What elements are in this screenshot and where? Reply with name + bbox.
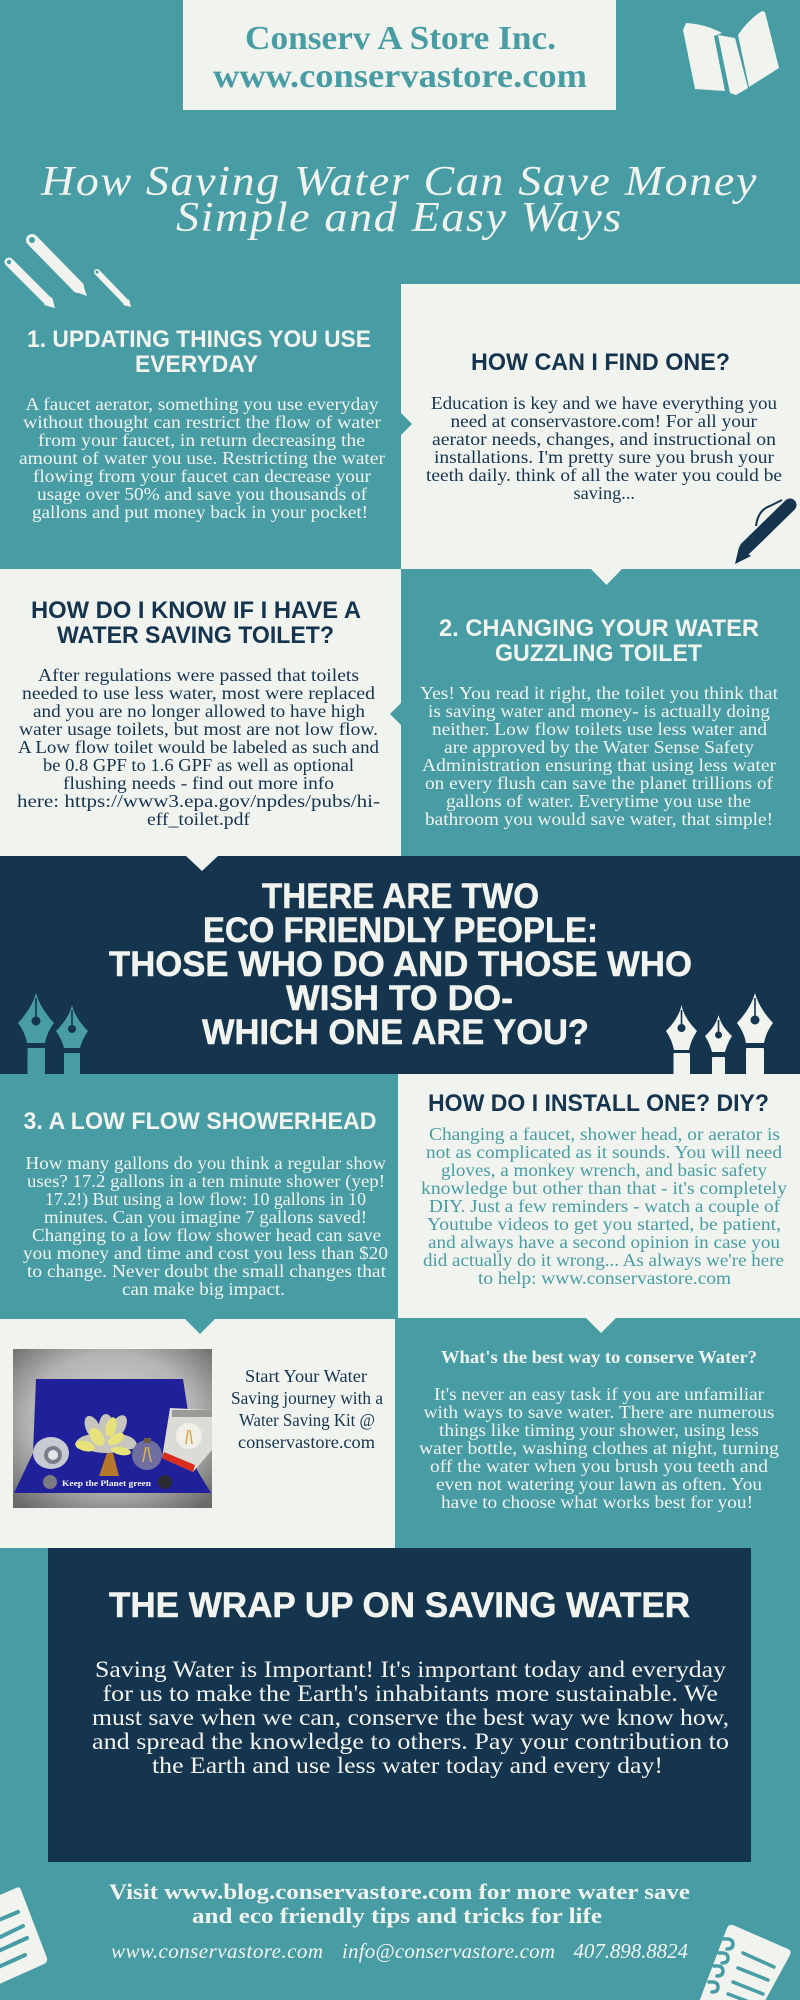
image: water saving kit photo: Keep the Planet green — [62, 1478, 151, 1488]
text: changing a faucet: gloves, a monkey wrench, and basic safety — [441, 1160, 767, 1180]
text: faucet aerator — [19, 394, 385, 522]
title: Simple and Easy Ways — [176, 195, 623, 241]
text: after regulations: water usage toilets, but most are not low flow. — [19, 719, 378, 739]
text: changing a faucet: not as complicated as it sounds. You will need — [426, 1142, 782, 1162]
text: how many gallons: you money and time and cost you less than $20 — [23, 1243, 388, 1263]
arrow: cream down pointer to best way panel — [586, 1318, 616, 1333]
text: yes you read it right: Yes! You read it right, the toilet you think that — [420, 683, 778, 703]
icon: pencils — [7, 237, 131, 308]
footer: contact details: www.conservastore.com — [111, 1939, 323, 1963]
text: how many gallons: uses? 17.2 gallons in a ten minute shower (yep! — [27, 1171, 385, 1191]
text: education is key — [426, 393, 782, 503]
arrow: teal down pointer — [185, 1319, 215, 1334]
panel: the wrap up on saving water — [48, 1548, 751, 1862]
arrow: cream down pointer — [591, 569, 622, 585]
text: changing a faucet: DIY. Just a few reminders - watch a couple of — [429, 1196, 780, 1216]
footer: contact details: info@conservastore.com — [342, 1939, 555, 1963]
text: how many gallons: can make big impact. — [122, 1279, 285, 1299]
text: after regulations: eff_toilet.pdf — [147, 809, 250, 829]
heading: eco friendly quote: THOSE WHO DO AND THOSE WHO — [109, 945, 692, 984]
text: never an easy task: even not watering your lawn as often. You — [436, 1474, 762, 1494]
footer: contact details — [111, 1939, 688, 1963]
heading: eco friendly quote — [109, 877, 692, 1052]
panel: updating things you use everyday — [0, 284, 401, 569]
panel: how do I install one — [398, 1074, 800, 1318]
text: yes you read it right: gallons of water. Everytime you use the — [446, 791, 751, 811]
text: saving water is important: for us to make the Earth's inhabitants more sustainable. We — [102, 1681, 718, 1706]
text: never an easy task: have to choose what works best for you! — [441, 1492, 753, 1512]
text: education is key: need at conservastore.com! For all your — [450, 411, 757, 431]
text: yes you read it right: on every flush can save the planet trillions of — [425, 773, 773, 793]
heading: eco friendly quote: WISH TO DO- — [286, 979, 513, 1018]
text: saving water is important: must save when we can, conserve the best way we know how, — [92, 1705, 729, 1730]
title: How Saving Water Can Save Money — [40, 159, 758, 205]
title — [40, 159, 758, 241]
text: faucet aerator: flowing from your faucet can decrease your — [33, 466, 371, 486]
heading: low flow showerhead: 3. A LOW FLOW SHOWERHEAD — [24, 1108, 376, 1135]
text: faucet aerator: usage over 50% and save you thousands of — [37, 484, 367, 504]
image: water saving kit photo — [13, 1349, 212, 1508]
text: saving water is important: the Earth and use less water today and every day! — [152, 1753, 663, 1778]
arrow: teal right pointer — [401, 413, 412, 435]
text: after regulations: After regulations were passed that toilets — [38, 665, 359, 685]
text: after regulations — [17, 665, 380, 829]
header: company name box: www.conservastore.com — [213, 58, 587, 95]
text: saving water is important: Saving Water is Important! It's important today and everyday — [95, 1657, 727, 1682]
heading: water guzzling toilet — [439, 615, 759, 667]
header: company name box: Conserv A Store Inc. — [245, 20, 556, 57]
text: how many gallons: 17.2!) But using a low flow: 10 gallons in 10 — [45, 1189, 366, 1209]
text: saving water is important — [92, 1657, 729, 1778]
text: never an easy task: with ways to save water. There are numerous — [424, 1402, 775, 1422]
text: yes you read it right: Administration ensuring that using less water — [422, 755, 776, 775]
heading: water guzzling toilet: 2. CHANGING YOUR WATER — [439, 615, 759, 642]
text: yes you read it right: bathroom you would save water, that simple! — [425, 809, 773, 829]
icon: open book — [683, 11, 779, 95]
text: education is key: aerator needs, changes, and instructional on — [432, 429, 776, 449]
icon: cream pen nibs — [666, 993, 773, 1078]
text: yes you read it right — [420, 683, 778, 829]
text: after regulations: needed to use less water, most were replaced — [22, 683, 375, 703]
heading: best way to conserve: What's the best way to conserve Water? — [441, 1347, 757, 1367]
heading: eco friendly quote: WHICH ONE ARE YOU? — [202, 1013, 589, 1052]
text: never an easy task: It's never an easy task if you are unfamiliar — [434, 1384, 764, 1404]
panel: how do I know if I have a water saving toilet — [0, 569, 401, 856]
footer: visit the blog — [109, 1879, 690, 1928]
text: how many gallons: minutes. Can you imagine 7 gallons saved! — [44, 1207, 367, 1227]
text: saving water is important: and spread the knowledge to others. Pay your contribution to — [92, 1729, 729, 1754]
heading: eco friendly quote: THERE ARE TWO — [262, 877, 539, 916]
icon: notepad right — [696, 1925, 791, 2000]
heading: updating things: 1. UPDATING THINGS YOU USE — [27, 326, 371, 353]
heading: wrap up: THE WRAP UP ON SAVING WATER — [109, 1586, 690, 1625]
text: education is key: Education is key and we have everything you — [431, 393, 777, 413]
text: yes you read it right: neither. Low flow toilets use less water and — [432, 719, 767, 739]
heading: updating things: EVERYDAY — [135, 351, 258, 378]
text: education is key: installations. I'm pretty sure you brush your — [434, 447, 774, 467]
text: changing a faucet: knowledge but other than that - it's completely — [421, 1178, 787, 1198]
text: after regulations: be 0.8 GPF to 1.6 GPF as well as optional — [43, 755, 354, 775]
footer: visit the blog: and eco friendly tips and tricks for life — [192, 1903, 602, 1928]
text: after regulations: and you are no longer allowed to have high — [33, 701, 365, 721]
icon: teal pen nibs — [18, 993, 88, 1078]
text: never an easy task: water bottle, washing clothes at night, turning — [419, 1438, 779, 1458]
text: faucet aerator: without thought can restrict the flow of water — [23, 412, 381, 432]
text: start your water saving journey — [231, 1366, 383, 1452]
text: never an easy task: things like timing your shower, using less — [439, 1420, 759, 1440]
heading: updating things — [27, 326, 371, 378]
panel: eco friendly people banner — [0, 856, 800, 1074]
panel: water saving kit — [0, 1319, 395, 1548]
text: how many gallons: How many gallons do you think a regular show — [26, 1153, 386, 1173]
text: how many gallons: to change. Never doubt the small changes that — [27, 1261, 386, 1281]
text: never an easy task — [419, 1384, 779, 1512]
text: faucet aerator: A faucet aerator, something you use everyday — [26, 394, 379, 414]
text: faucet aerator: amount of water you use. Restricting the water — [19, 448, 385, 468]
heading: water saving toilet: WATER SAVING TOILET? — [57, 622, 334, 649]
heading: water saving toilet: HOW DO I KNOW IF I HAVE A — [31, 597, 361, 624]
heading: eco friendly quote: ECO FRIENDLY PEOPLE: — [203, 911, 598, 950]
text: faucet aerator: from your faucet, in return decreasing the — [38, 430, 365, 450]
panel: how can I find one — [401, 284, 800, 569]
heading: install one DIY: HOW DO I INSTALL ONE? DIY? — [428, 1090, 769, 1117]
heading: water guzzling toilet: GUZZLING TOILET — [495, 640, 702, 667]
text: changing a faucet: Youtube videos to get you started, be patient, — [427, 1214, 781, 1234]
text: how many gallons: Changing to a low flow shower head can save — [32, 1225, 381, 1245]
panel: changing your water guzzling toilet — [401, 569, 800, 856]
text: start your water saving journey: Start Your Water — [245, 1366, 367, 1386]
heading: how can I find one: HOW CAN I FIND ONE? — [471, 349, 730, 376]
icon: pen — [735, 500, 790, 564]
text: never an easy task: off the water when you brush you teeth and — [430, 1456, 768, 1476]
text: after regulations: flushing needs - find out more info — [63, 773, 334, 793]
panel: best way to conserve water — [395, 1318, 800, 1548]
header: company name box — [183, 0, 616, 110]
text: faucet aerator: gallons and put money back in your pocket! — [32, 502, 368, 522]
arrow: teal left pointer — [390, 703, 401, 725]
heading: water saving toilet — [31, 597, 361, 649]
text: changing a faucet: and always have a second opinion in case you — [428, 1232, 780, 1252]
footer: contact details: 407.898.8824 — [574, 1939, 688, 1963]
icon: notepad left — [0, 1887, 47, 1986]
panel: a low flow showerhead — [0, 1074, 398, 1319]
text: start your water saving journey: conservastore.com — [238, 1432, 375, 1452]
text: after regulations: here: https://www3.epa.gov/npdes/pubs/hi- — [17, 791, 380, 811]
text: yes you read it right: is saving water and money- is actually doing — [428, 701, 770, 721]
text: education is key: teeth daily. think of all the water you could be — [426, 465, 782, 485]
text: changing a faucet: did actually do it wrong... As always we're here — [423, 1250, 784, 1270]
text: how many gallons — [23, 1153, 388, 1299]
text: changing a faucet: to help: www.conservastore.com — [478, 1268, 731, 1288]
text: changing a faucet: Changing a faucet, shower head, or aerator is — [429, 1124, 780, 1144]
text: start your water saving journey: Water Saving Kit @ — [239, 1410, 375, 1430]
footer: visit the blog: Visit www.blog.conservastore.com for more water save — [109, 1879, 690, 1904]
text: changing a faucet — [421, 1124, 787, 1288]
text: after regulations: A Low flow toilet would be labeled as such and — [18, 737, 379, 757]
text: yes you read it right: are approved by the Water Sense Safety — [444, 737, 754, 757]
arrow: cream down pointer to banner — [186, 856, 218, 871]
text: start your water saving journey: Saving journey with a — [231, 1388, 383, 1408]
text: education is key: saving... — [574, 483, 635, 503]
